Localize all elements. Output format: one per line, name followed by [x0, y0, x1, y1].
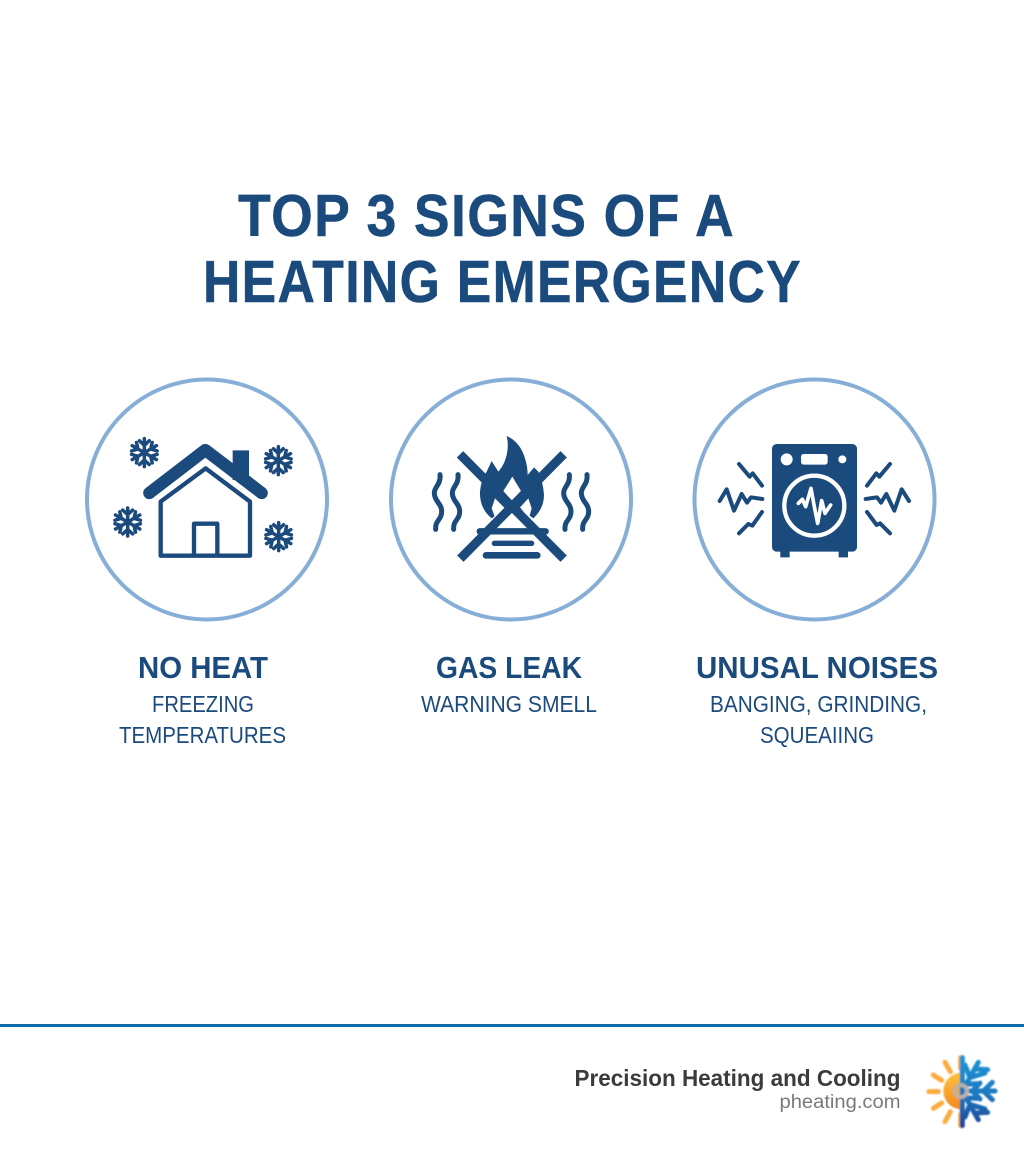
- footer brand text: [574, 1065, 900, 1113]
- icon: house with snowflakes: [87, 380, 327, 620]
- description: unusual noises: SQUEAIING: [760, 722, 874, 748]
- panel: unusual noises: [694, 380, 938, 748]
- description: gas leak: WARNING SMELL: [421, 691, 597, 717]
- footer brand text: pheating.com: [780, 1092, 900, 1113]
- title: [203, 183, 802, 315]
- title: TOP 3 SIGNS OF A: [238, 183, 735, 249]
- title: HEATING EMERGENCY: [203, 249, 802, 315]
- description: no heat: TEMPERATURES: [119, 722, 286, 748]
- icon: crossed flame with fumes: [391, 380, 631, 620]
- heading: unusual noises: UNUSAL NOISES: [696, 650, 938, 685]
- icon: noisy furnace: [694, 380, 934, 620]
- footer divider: [0, 1024, 1024, 1027]
- description: no heat: FREEZING: [152, 691, 254, 717]
- panel: no heat: [87, 380, 327, 748]
- heading: no heat: NO HEAT: [138, 650, 268, 685]
- panel: gas leak: [391, 380, 631, 717]
- description: unusual noises: BANGING, GRINDING,: [710, 691, 927, 717]
- icon: sun and snowflake logo: [929, 1058, 995, 1126]
- footer brand text: Precision Heating and Cooling: [574, 1065, 900, 1091]
- description: unusual noises: [710, 691, 927, 748]
- heading: gas leak: GAS LEAK: [436, 650, 583, 685]
- description: no heat: [119, 691, 286, 748]
